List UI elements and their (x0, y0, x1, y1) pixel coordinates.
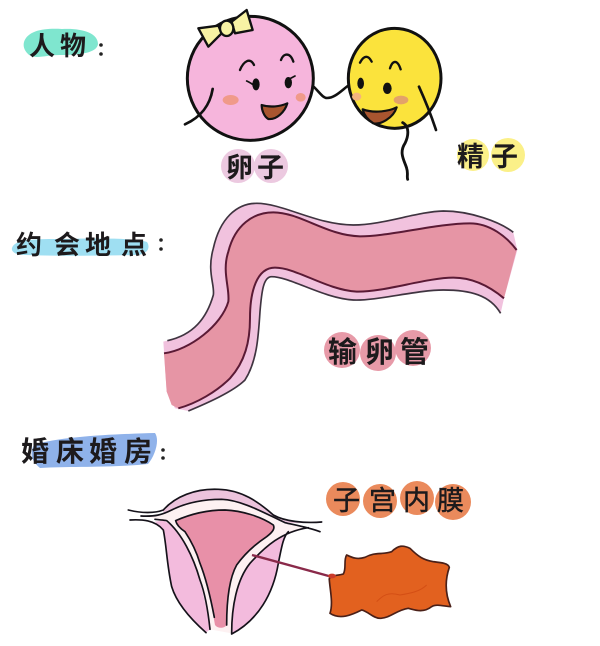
tube inner channel (164, 212, 517, 408)
egg eyelashes (247, 76, 295, 86)
uterus white layer (141, 499, 305, 633)
egg mouth (262, 103, 287, 119)
uterus outlines (128, 489, 322, 634)
label: endometrium (326, 481, 471, 520)
label: sperm: 精子 (457, 142, 518, 172)
egg body (187, 16, 313, 140)
sperm mouth (363, 107, 397, 124)
uterus diagram (128, 489, 322, 634)
label: egg: 卵子 (226, 153, 284, 183)
sperm cheeks (352, 93, 361, 101)
uterus top band (163, 489, 302, 523)
tube outer outline (167, 203, 513, 411)
sperm eyebrows (360, 57, 401, 69)
label: endometrium: 子宫内膜 (333, 486, 464, 516)
sperm tail (402, 123, 408, 179)
sperm eyes (357, 78, 392, 94)
egg bow (198, 10, 253, 47)
sperm body (348, 28, 441, 128)
uterus cavity (176, 510, 274, 628)
heading: wedding bed and room: 婚床婚房 (21, 436, 152, 467)
heading: meeting place: 约会地点 (16, 230, 147, 260)
sperm arm (419, 87, 436, 130)
pointer line (252, 555, 336, 578)
egg cheeks (223, 95, 239, 105)
endometrium tissue (328, 546, 451, 618)
egg arm (185, 89, 213, 124)
label: fallopian tube: 输卵管 (328, 336, 429, 369)
uterus side body (155, 521, 210, 633)
tube outer wall (163, 203, 517, 411)
egg eyes (252, 77, 292, 90)
character: sperm (348, 28, 441, 179)
tube inner outline (164, 212, 517, 408)
heading: characters: 人物 (29, 31, 86, 61)
character: egg (185, 10, 313, 140)
egg eyebrows (240, 55, 293, 70)
fallopian tube (163, 203, 517, 411)
holding hands arm (314, 85, 349, 98)
heading: characters (24, 29, 103, 61)
